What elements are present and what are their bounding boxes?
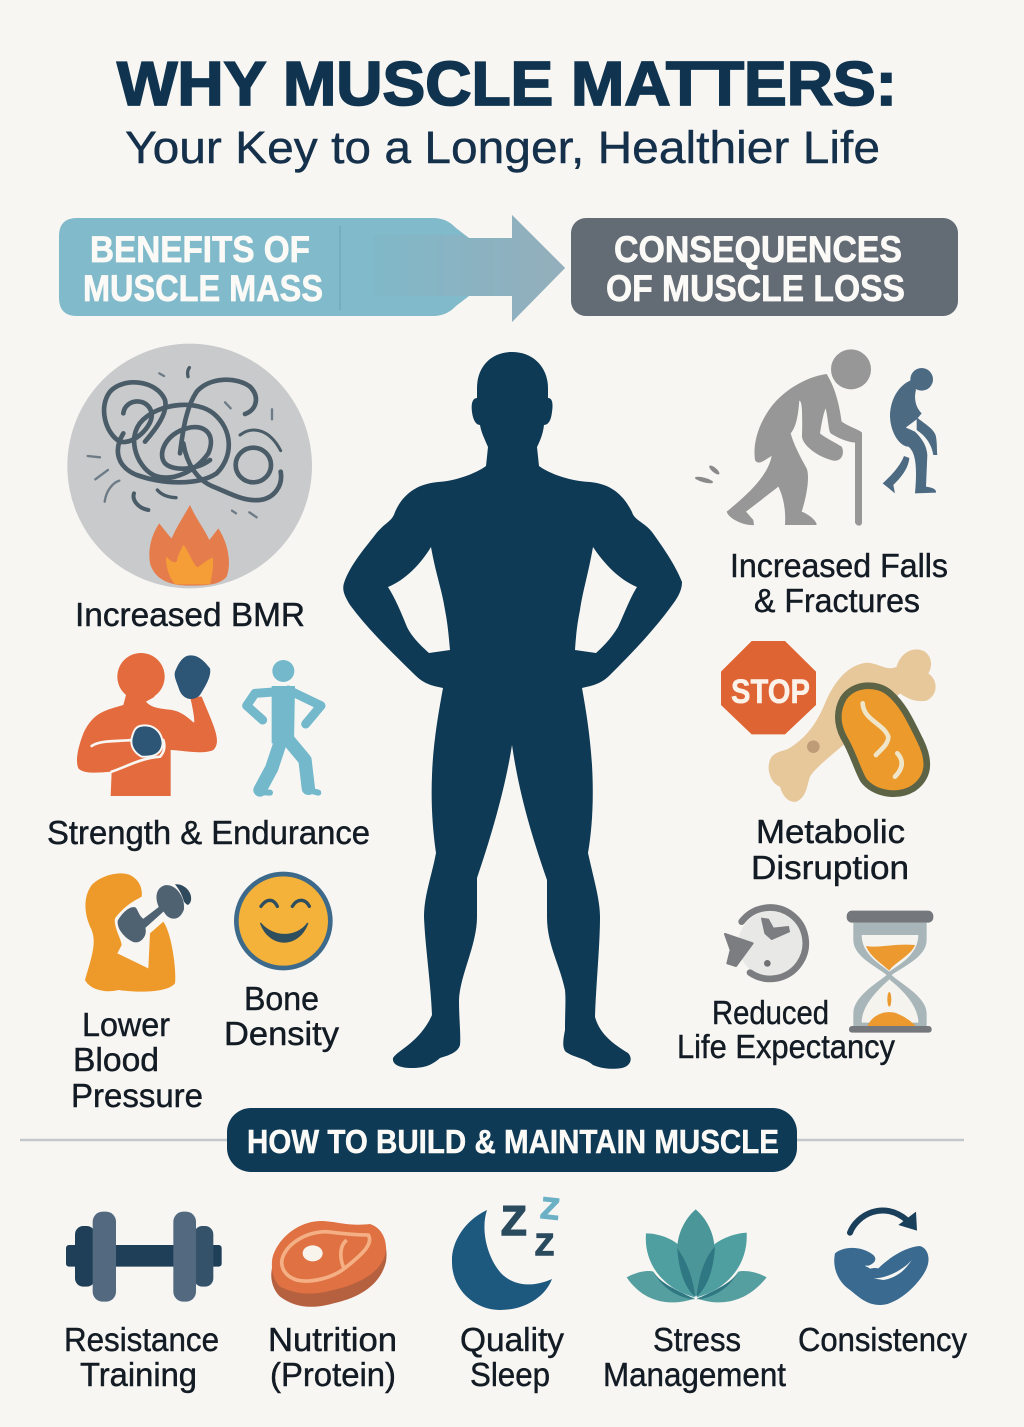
label: Increased Falls & Fractures — [730, 547, 948, 619]
label: Bone Density: Density — [224, 1015, 340, 1052]
icon: crescent moon with Z letters: Z — [535, 1227, 554, 1262]
label: Consistency: Consistency — [798, 1321, 967, 1358]
icon: hourglass — [847, 911, 933, 1033]
title: WHY MUSCLE MATTERS: — [117, 50, 897, 119]
label: Increased Falls & Fractures: & Fractures — [754, 582, 920, 619]
icon: crescent moon with Z letters: Z — [539, 1192, 561, 1227]
section heading: how to build and maintain muscle — [227, 1108, 797, 1172]
label: Quality Sleep: Sleep — [470, 1356, 550, 1393]
label: Lower Blood Pressure: Blood — [73, 1041, 159, 1078]
icon: crescent moon with Z letters — [452, 1192, 561, 1310]
label: Metabolic Disruption — [751, 813, 909, 886]
banner: consequences box — [571, 218, 958, 316]
label: Metabolic Disruption: Disruption — [751, 849, 909, 886]
icon: steak — [271, 1221, 387, 1307]
icon: rewinding clock — [725, 908, 806, 979]
icon: boxer figure and walking figure — [77, 653, 321, 796]
label: Nutrition (Protein) — [268, 1321, 397, 1393]
central body silhouette — [343, 352, 682, 1069]
label: Resistance Training — [64, 1321, 219, 1393]
label: Strength & Endurance: Strength & Endurance — [47, 814, 370, 851]
label: Resistance Training: Training — [80, 1356, 197, 1393]
label: Quality Sleep: Quality — [460, 1321, 564, 1358]
label: Increased Falls & Fractures: Increased Falls — [730, 547, 948, 584]
icon: stop sign, bone and kidney bean: STOP — [731, 673, 810, 711]
label: Increased BMR: Increased BMR — [75, 596, 305, 633]
icon: flexed arm with dumbbell — [85, 873, 191, 992]
label: Lower Blood Pressure: Pressure — [71, 1077, 203, 1114]
label: Stress Management: Stress — [653, 1321, 741, 1358]
icon: lotus flower — [627, 1209, 767, 1302]
label: Metabolic Disruption: Metabolic — [756, 813, 905, 850]
banner: consequences box: OF MUSCLE LOSS — [606, 268, 905, 309]
icon: stooped elderly figures with cane — [694, 349, 937, 526]
icon: dumbbell — [66, 1212, 222, 1302]
label: Reduced Life Expectancy: Reduced — [712, 994, 829, 1031]
banner: benefits arrow: MUSCLE MASS — [83, 268, 323, 309]
label: Bone Density: Bone — [244, 980, 319, 1017]
label: Nutrition (Protein): (Protein) — [270, 1356, 396, 1393]
label: Reduced Life Expectancy: Life Expectancy — [677, 1028, 895, 1065]
section divider line — [20, 1139, 964, 1141]
label: Lower Blood Pressure — [71, 1006, 203, 1114]
label: Reduced Life Expectancy — [677, 994, 895, 1065]
icon: smiley face — [236, 874, 330, 968]
label: Bone Density — [224, 980, 340, 1052]
label: Resistance Training: Resistance — [64, 1321, 219, 1358]
label: Quality Sleep — [460, 1321, 564, 1393]
label: Stress Management — [603, 1321, 786, 1393]
label: Lower Blood Pressure: Lower — [82, 1006, 170, 1043]
icon: crescent moon with Z letters: Z — [501, 1197, 527, 1244]
subtitle: Your Key to a Longer, Healthier Life — [125, 122, 880, 173]
label: Stress Management: Management — [603, 1356, 786, 1393]
banner: consequences box: CONSEQUENCES — [614, 229, 902, 270]
icon: consistency cycle arrow and flexed arm — [834, 1210, 929, 1305]
banner: benefits arrow: BENEFITS OF — [90, 229, 310, 270]
icon: BMR circle with tangled lines and flame — [67, 344, 312, 588]
section heading: how to build and maintain muscle: HOW TO BUILD & MAINTAIN MUSCLE — [247, 1123, 779, 1160]
label: Nutrition (Protein): Nutrition — [268, 1321, 397, 1358]
banner: benefits arrow — [59, 215, 565, 322]
icon: stop sign, bone and kidney bean — [721, 641, 936, 802]
